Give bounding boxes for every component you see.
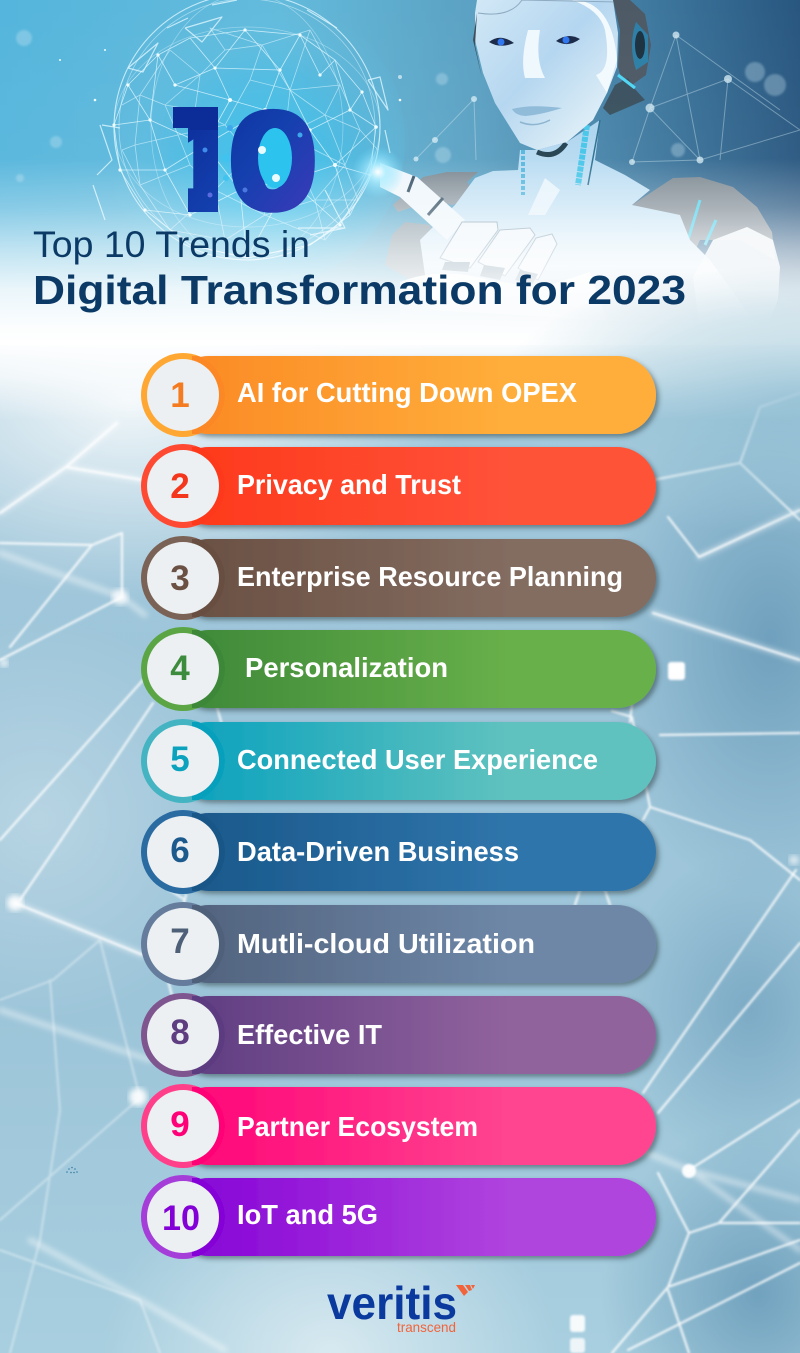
item 6 (141, 810, 656, 894)
item 3 (141, 536, 656, 620)
item 6: 6 (170, 831, 190, 870)
background network nodes (0, 589, 799, 1353)
item 1: 1 (170, 376, 190, 415)
robot neck cables (523, 120, 600, 215)
background network lines (0, 393, 800, 1353)
item 3: Enterprise Resource Planning (237, 561, 623, 592)
robot (352, 0, 780, 330)
item 5 (141, 719, 656, 803)
finger glow (352, 146, 404, 198)
robot arm and shoulder parts (385, 172, 775, 285)
item 7: Mutli-cloud Utilization (237, 928, 535, 959)
logo: veritis transcend: veritis (327, 1277, 457, 1329)
item 4: Personalization (245, 652, 448, 683)
item 2: 2 (170, 467, 190, 506)
sphere sparkle dots (59, 28, 401, 227)
header background (0, 0, 800, 340)
item 9: Partner Ecosystem (237, 1111, 478, 1142)
item 7: 7 (170, 922, 190, 961)
title line 2: Digital Transformation for 2023 (33, 267, 686, 313)
item 2 (141, 444, 656, 528)
logo: veritis transcend: transcend (397, 1319, 456, 1335)
title (33, 224, 686, 313)
item 9: 9 (170, 1105, 190, 1144)
fade into lower background (0, 265, 800, 535)
number 10 (173, 107, 315, 213)
item 10: 10 (162, 1199, 200, 1238)
robot head (475, 0, 618, 150)
logo chevrons (456, 1285, 475, 1296)
item 9 (141, 1084, 656, 1168)
network sphere (93, 0, 405, 290)
item 8: 8 (170, 1013, 190, 1052)
item 6: Data-Driven Business (237, 836, 519, 867)
item 10: IoT and 5G (237, 1199, 378, 1230)
item 3: 3 (170, 559, 190, 598)
title line 1: Top 10 Trends in (33, 224, 310, 265)
robot torso (420, 120, 760, 330)
item 10 (141, 1175, 656, 1259)
number 10: 0 (230, 87, 316, 236)
item 8 (141, 993, 656, 1077)
item 4: 4 (170, 649, 190, 688)
robot headset (473, 0, 651, 115)
item 5: Connected User Experience (237, 744, 598, 775)
item 7 (141, 902, 656, 986)
tiny mark (66, 1167, 78, 1173)
item 1: AI for Cutting Down OPEX (237, 377, 577, 408)
robot fingers (400, 222, 610, 330)
header white fade (0, 0, 800, 345)
robot index finger (380, 163, 465, 240)
item 2: Privacy and Trust (237, 469, 461, 500)
item 4 (141, 627, 656, 711)
number 10: 1 (167, 87, 242, 236)
item 5: 5 (170, 740, 190, 779)
robot face details (478, 0, 618, 125)
item 1 (141, 353, 656, 437)
robot right arm (693, 227, 780, 330)
item 8: Effective IT (237, 1019, 382, 1050)
